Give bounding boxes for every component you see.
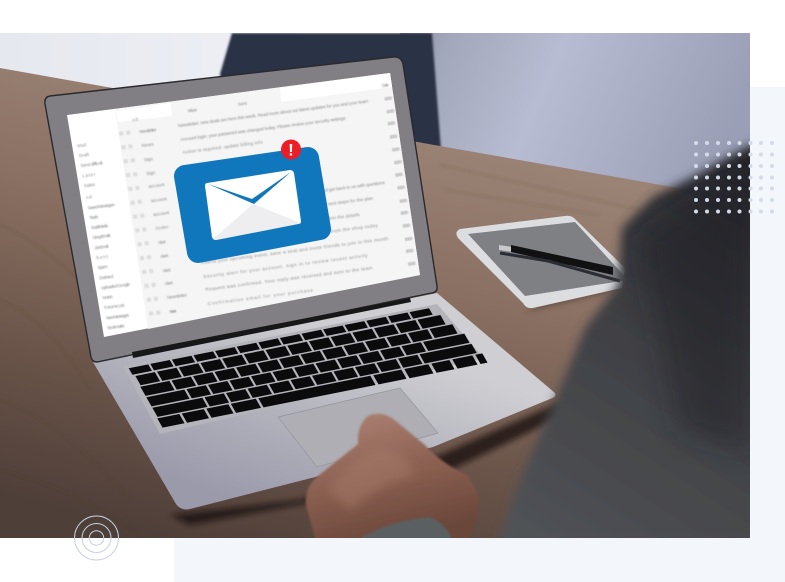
knuckle highlight — [332, 454, 410, 508]
sender column: Alert — [162, 267, 172, 273]
date column: 10:00 — [386, 108, 395, 114]
date column: 10:00 — [397, 185, 406, 191]
laptop shadow on desk — [170, 402, 565, 525]
date column: 10:00 — [384, 95, 393, 101]
sender column: account — [148, 182, 166, 189]
subject column: Your order is on its way, track delivery of your package from the shop today — [198, 223, 379, 251]
subject column: Newsletter: new deals are here this week. Read more about our latest updates for you and your team — [178, 98, 369, 128]
sidebar folder labels: All — [86, 195, 92, 200]
laptop keyboard keys — [131, 306, 485, 423]
lower letter key row — [155, 348, 475, 412]
sidebar folder labels: Notes — [102, 294, 114, 300]
wall: left side — [0, 33, 234, 88]
row checkboxes — [121, 131, 159, 320]
date column: 10:00 — [394, 172, 404, 178]
person's shoulder, out of focus — [497, 145, 765, 545]
icon: white envelope — [205, 170, 301, 240]
sender column: News — [141, 142, 155, 148]
tablet on desk — [456, 216, 628, 312]
darker jacket shading — [648, 209, 750, 446]
subject column: Account login: your password was changed today. Please review your security settings — [180, 116, 347, 142]
sender column: Sign — [146, 170, 156, 176]
shirt sleeve — [358, 517, 452, 540]
sender column: Alert — [160, 253, 169, 259]
desk wood grain — [0, 165, 640, 536]
inbox interface text — [74, 82, 424, 330]
laptop screen — [67, 73, 420, 337]
date column: 10:00 — [405, 248, 414, 254]
home key row — [149, 338, 467, 402]
sidebar folder labels: Spam — [97, 264, 108, 270]
pen — [499, 245, 620, 281]
search box — [116, 103, 172, 122]
tablet screen — [468, 222, 628, 296]
sidebar folder labels: Social Media — [91, 223, 109, 230]
date column: 10:00 — [393, 159, 403, 165]
sender column: account — [150, 196, 168, 203]
laptop trackpad — [278, 388, 438, 467]
sender column: Alert — [164, 280, 174, 286]
sidebar folder labels: Draft — [79, 152, 90, 158]
laptop keyboard well — [123, 304, 484, 434]
laptop hinge slot — [132, 298, 411, 358]
sender column: Newsletter — [139, 127, 157, 134]
subject column: Action is required: update billing info — [182, 140, 263, 155]
icon: blue rounded panel — [185, 158, 320, 252]
toolbar labels: Sent — [238, 101, 248, 107]
office chair back — [220, 33, 441, 150]
sidebar folder labels: New Messages — [106, 312, 130, 320]
desk surface — [0, 68, 750, 538]
laptop lid — [45, 57, 437, 362]
subject column: Confirmation email for your purchase — [207, 287, 314, 306]
email notification icon — [185, 140, 320, 252]
space bar row — [160, 358, 485, 423]
sidebar folder labels: Forums List — [104, 303, 125, 310]
subject column: Your invoice is ready and attached, please review the total amount and get back to us with questions — [191, 180, 386, 210]
subject column: Attend your upcoming event, save a seat and invite friends to join in this month — [201, 236, 389, 265]
subject column: Security alert for your account, sign in to review recent activity — [203, 253, 368, 279]
date column: 10:00 — [389, 133, 398, 139]
date column — [384, 96, 416, 266]
decorative concentric rings — [74, 516, 118, 560]
sidebar folder labels: Sent — [96, 254, 109, 260]
number key row — [138, 320, 443, 381]
toolbar labels: Inbox — [188, 107, 198, 114]
empty title bar region — [280, 73, 392, 102]
toolbar labels: Date — [382, 82, 390, 88]
tablet shadow — [530, 290, 616, 312]
sender column: Alert — [157, 239, 167, 245]
icon: envelope lower fold — [213, 204, 301, 240]
background panel: pale blue backing — [174, 87, 785, 582]
sender column: News — [169, 308, 177, 314]
toolbar labels — [132, 82, 390, 123]
subject column: Your reply has been received and we will contact you soon about next steps for the plan — [194, 196, 374, 224]
laptop base — [93, 293, 555, 509]
decorative dot grid — [694, 141, 774, 214]
toolbar labels: All — [132, 117, 139, 123]
subject column: Your message has been delivered to your contact. Please confirm the details — [196, 212, 361, 238]
sidebar folder labels — [76, 142, 130, 330]
subject column: Request was confirmed. Your reply was received and sent to the team — [205, 265, 373, 292]
date column: 10:00 — [404, 236, 413, 242]
sidebar folder labels: Mail — [77, 142, 87, 148]
icon: red alert badge: ! — [288, 140, 294, 160]
sidebar folder labels: Uploaded Google — [101, 282, 131, 290]
date column: 10:00 — [387, 120, 396, 126]
subject column — [178, 98, 402, 306]
date column: 10:00 — [402, 223, 411, 229]
sidebar folder labels: Send difficult — [80, 160, 104, 168]
wall: right side — [400, 33, 750, 188]
sidebar folder labels: Join Email — [94, 244, 109, 250]
sender column: Newsletter — [167, 293, 188, 300]
sidebar folder labels: Sales — [84, 182, 96, 188]
tablet body — [456, 216, 625, 308]
sidebar folder labels: Group Emails — [92, 233, 112, 240]
date column: 10:00 — [400, 210, 409, 216]
sidebar folder labels: Deleted — [99, 274, 114, 280]
sender column: account — [153, 210, 170, 217]
sender column — [139, 127, 190, 314]
email list pane — [115, 73, 420, 329]
sidebar folder labels: Trash — [89, 214, 99, 220]
hand on trackpad — [306, 414, 479, 545]
sender column: Sign — [144, 156, 154, 162]
date column: 10:00 — [407, 261, 416, 267]
date column: 10:00 — [399, 198, 408, 204]
date column: 10:00 — [391, 146, 400, 152]
sidebar folder labels: Later — [82, 172, 96, 178]
icon: envelope flap — [208, 172, 291, 204]
function key row — [131, 311, 433, 372]
sidebar folder labels: Saved Messages — [87, 202, 116, 210]
sidebar folder labels: Bookmarks — [107, 323, 126, 330]
upper letter key row — [143, 329, 455, 391]
sender column: Order — [155, 224, 169, 231]
